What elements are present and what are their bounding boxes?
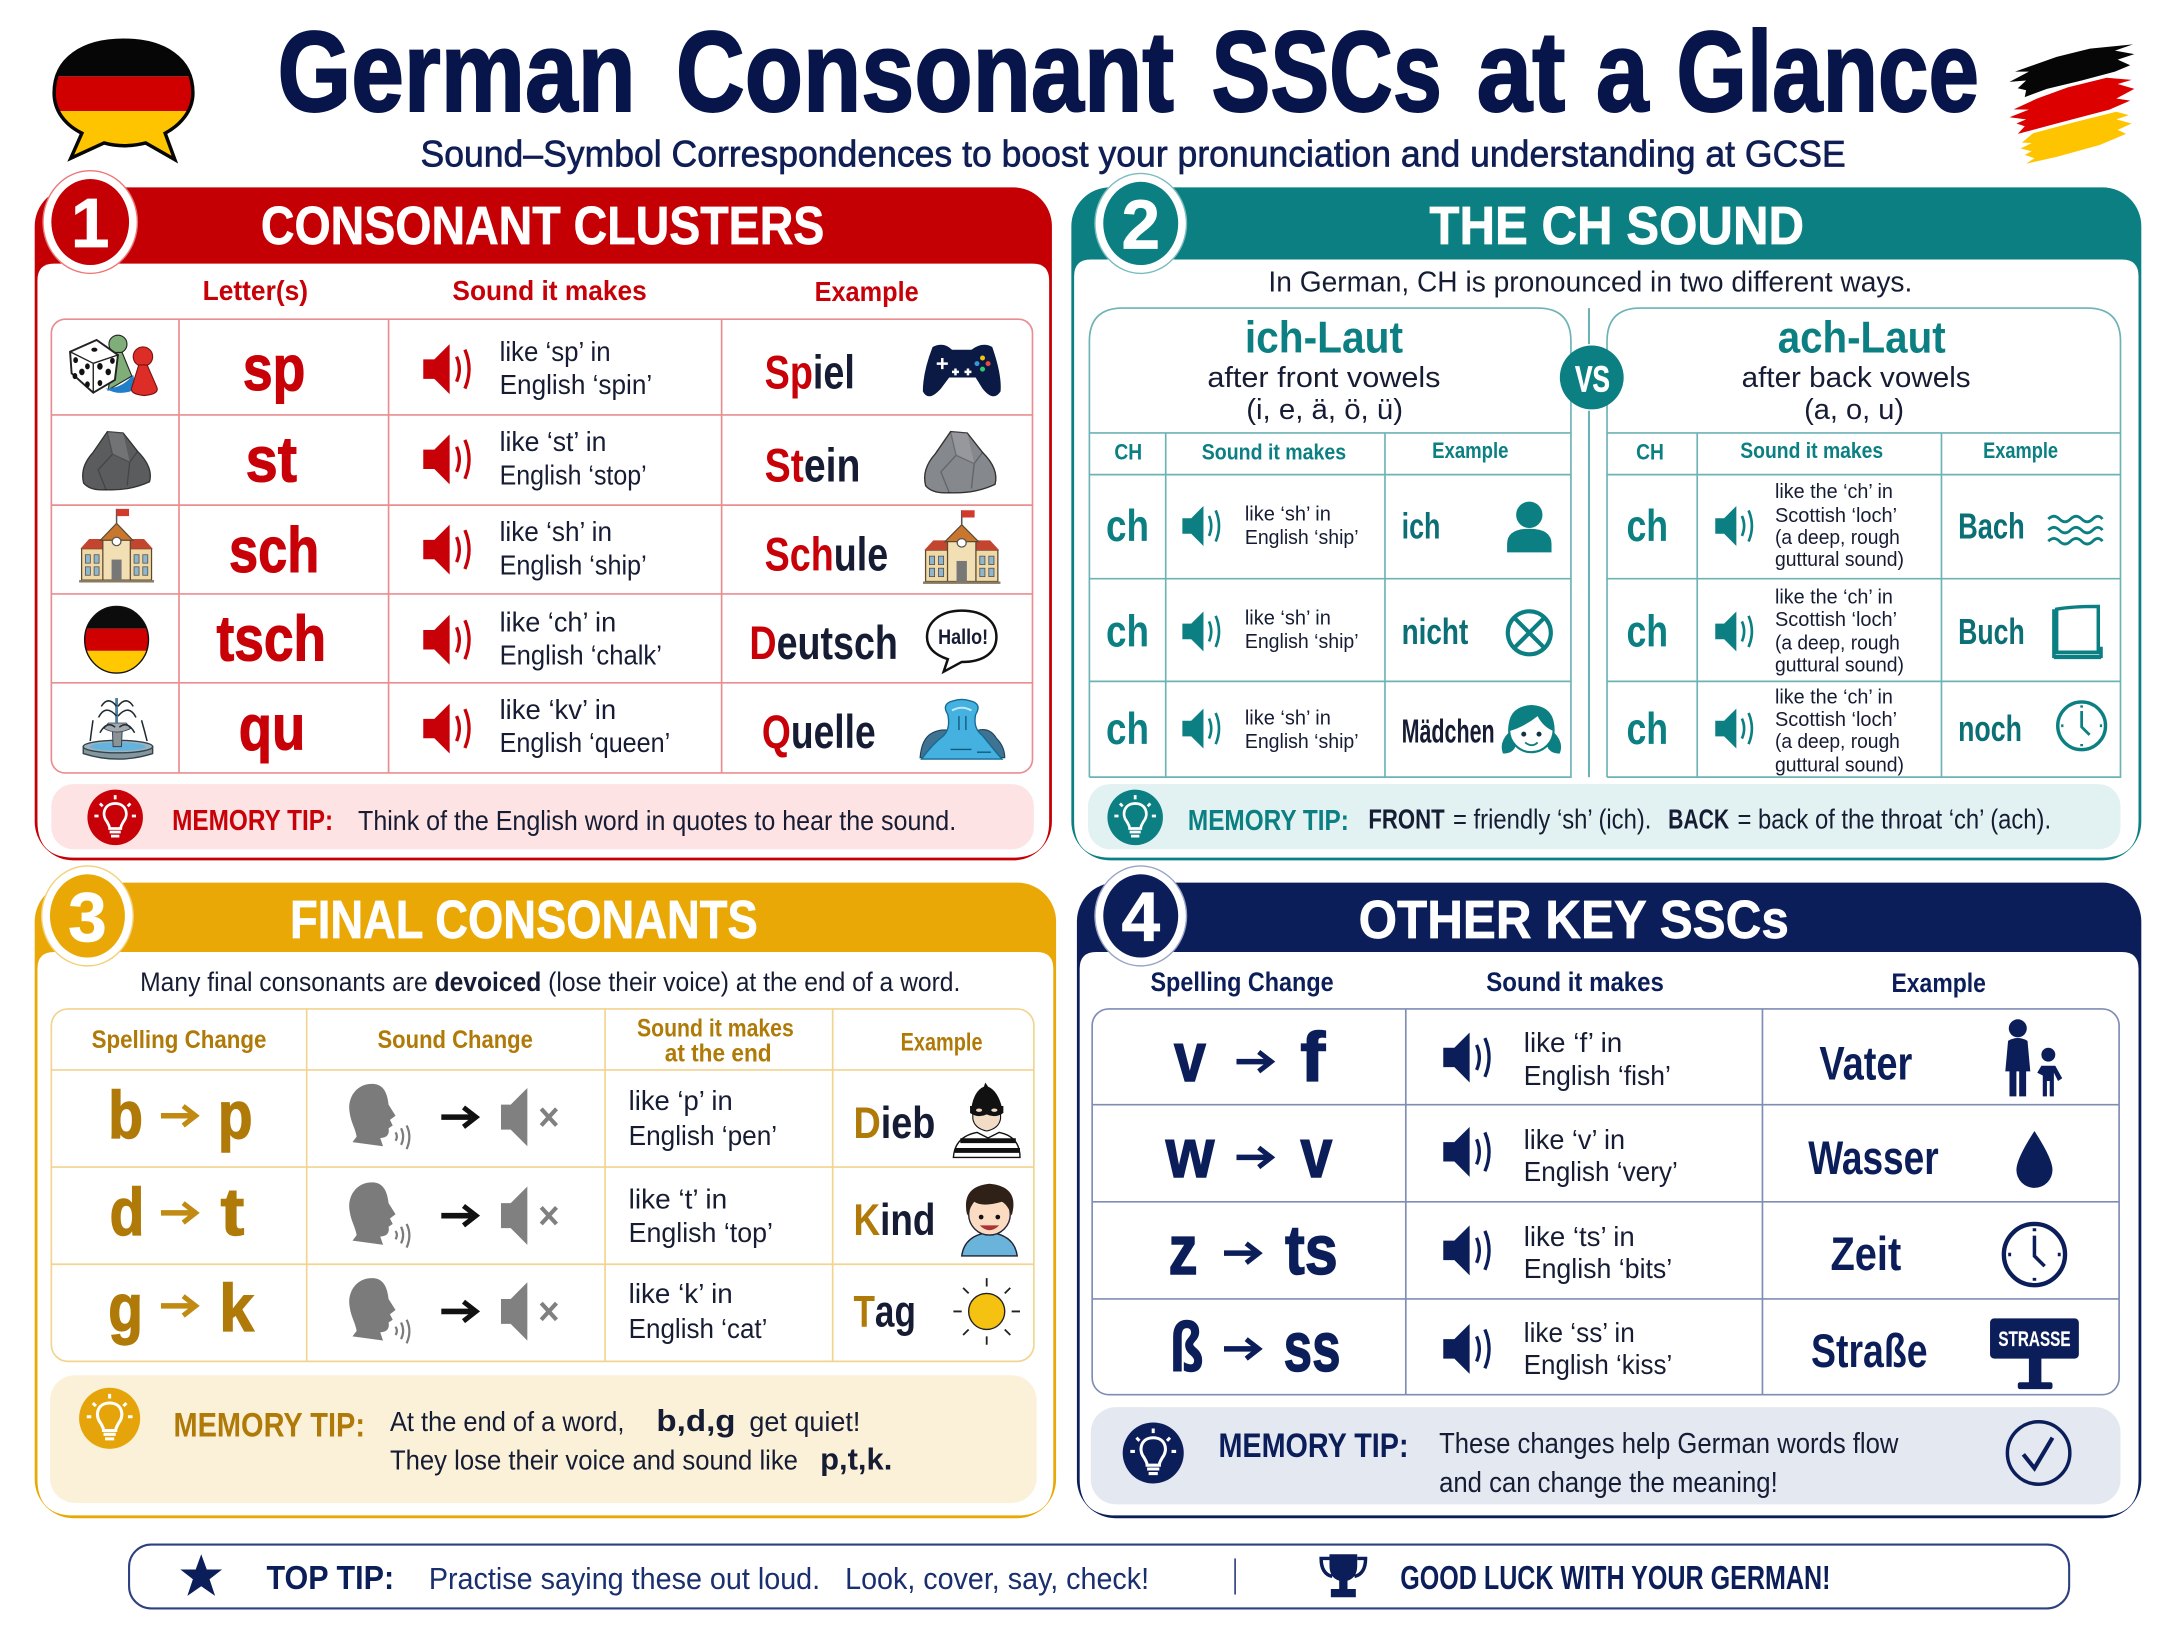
table: ach-Laut: Buch <box>1958 611 2025 652</box>
table: ach-Laut: like the ‘ch’ in <box>1775 687 1893 709</box>
table: ach-Laut: Scottish ‘loch’ <box>1775 709 1897 731</box>
table: ach-Laut: noch <box>1958 708 2022 749</box>
icon: water drop <box>2016 1131 2052 1188</box>
memory tip: MEMORY TIP: <box>1188 805 1349 837</box>
subtitle: Sound–Symbol Correspondences to boost your pronunciation and understanding at GCSE <box>420 133 1846 175</box>
sound descriptions <box>1524 1027 1678 1380</box>
spelling changes: p <box>218 1079 253 1153</box>
sound descriptions: English ‘stop’ <box>500 459 647 490</box>
example words: Spiel <box>765 346 855 399</box>
icon: flag circle <box>83 605 150 674</box>
divider line and VS badge: VS <box>1575 358 1610 399</box>
spelling changes: v <box>1300 1114 1333 1192</box>
column headings: Example <box>815 276 919 307</box>
badge 2 <box>1095 173 1187 273</box>
memory tip: get quiet! <box>749 1406 860 1437</box>
table: ach-Laut: (a deep, rough <box>1775 632 1900 654</box>
badge 4 <box>1095 866 1187 966</box>
spelling changes: z <box>1168 1211 1198 1289</box>
spelling changes: ts <box>1285 1211 1338 1289</box>
example words <box>1808 1037 1939 1377</box>
table: ach-Laut: Scottish ‘loch’ <box>1775 609 1897 631</box>
table <box>1092 1009 2119 1395</box>
badge 1: 1 <box>71 184 110 262</box>
example words: Dieb <box>853 1099 935 1148</box>
icon: thief <box>953 1082 1020 1157</box>
table: ach-Laut <box>1088 308 2120 849</box>
icon: clock <box>2058 702 2106 750</box>
table: ich-Laut: English ‘ship’ <box>1245 731 1359 753</box>
letters: tsch <box>216 603 326 675</box>
icon: waves <box>2048 516 2102 544</box>
table: ach-Laut: Sound it makes <box>1740 438 1883 463</box>
sound descriptions <box>629 1085 777 1344</box>
sound descriptions: like ‘p’ in <box>629 1085 733 1116</box>
intro text: In German, CH is pronounced in two different ways. <box>1268 266 1912 298</box>
table: ich-Laut: like ‘sh’ in <box>1245 503 1331 525</box>
icon: school left <box>79 509 154 583</box>
spelling changes: k <box>219 1272 255 1346</box>
icon: girl <box>1502 705 1561 754</box>
badge 3: 3 <box>68 878 107 956</box>
memory tip: MEMORY TIP: <box>172 805 333 837</box>
sound descriptions: like ‘kv’ in <box>500 694 616 725</box>
divider line and VS badge <box>1560 308 1624 777</box>
icon: sun <box>953 1278 1020 1345</box>
icon: Hallo speech bubble: Hallo! <box>938 626 988 649</box>
heading: FINAL CONSONANTS <box>290 890 758 950</box>
table: ach-Laut: like the ‘ch’ in <box>1775 481 1893 503</box>
spelling changes: f <box>1300 1018 1326 1096</box>
top tip text <box>429 1562 1149 1596</box>
panel: consonant clusters <box>35 171 1052 860</box>
top tip label: TOP TIP: <box>266 1560 394 1597</box>
example words: Vater <box>1819 1037 1912 1090</box>
letters <box>216 332 326 763</box>
spelling changes <box>1165 1018 1341 1386</box>
table: ach-Laut: Example <box>1983 438 2058 463</box>
sound descriptions: English ‘bits’ <box>1524 1253 1672 1284</box>
heading: CONSONANT CLUSTERS <box>261 196 824 256</box>
icon: book <box>2054 606 2101 658</box>
example words: Zeit <box>1830 1227 1901 1280</box>
icon: Hallo speech bubble <box>927 611 996 672</box>
sound descriptions: English ‘top’ <box>629 1217 773 1248</box>
icon: STRASSE sign: STRASSE <box>1998 1327 2071 1351</box>
icon: German flag speech bubble <box>52 38 195 164</box>
icon: star <box>180 1554 222 1596</box>
example words: Tag <box>853 1288 916 1337</box>
icon: school right <box>923 510 1000 584</box>
heading: OTHER KEY SSCs <box>1359 890 1789 950</box>
icon: dark rock <box>83 432 150 490</box>
table: ich-Laut: nicht <box>1402 611 1468 652</box>
icon: water spring <box>920 699 1005 759</box>
title: at <box>1477 9 1565 136</box>
table <box>51 1009 1034 1361</box>
sound descriptions: like ‘sh’ in <box>500 516 612 547</box>
badge 2: 2 <box>1121 185 1160 263</box>
memory tip <box>51 784 1034 849</box>
sound descriptions: English ‘cat’ <box>629 1313 767 1344</box>
icon: fountain <box>83 698 153 759</box>
table: ich-Laut: (i, e, ä, ö, ü) <box>1246 394 1403 426</box>
table: ich-Laut: like ‘sh’ in <box>1245 607 1331 629</box>
table <box>51 319 1032 773</box>
icon: dice and pawns <box>70 335 157 396</box>
column headings: Sound it makes <box>1486 967 1664 997</box>
spelling changes: ss <box>1284 1308 1341 1386</box>
column headings <box>1150 967 1986 998</box>
sound descriptions: English ‘queen’ <box>500 727 670 758</box>
bottom banner <box>129 1545 2069 1608</box>
spelling changes: b <box>108 1079 143 1153</box>
example words: Stein <box>765 439 860 492</box>
column headings: Example <box>901 1029 983 1057</box>
memory tip: = friendly ‘sh’ (ich). <box>1453 803 1651 834</box>
icon: parent and child <box>2005 1019 2062 1096</box>
panel: final consonants <box>35 866 1056 1518</box>
table: ich-Laut: CH <box>1114 439 1142 464</box>
title: Consonant <box>676 9 1174 136</box>
title: a <box>1596 9 1649 136</box>
spelling changes <box>108 1079 255 1346</box>
table: ich-Laut: Example <box>1432 438 1508 463</box>
sound descriptions: like ‘st’ in <box>500 426 606 457</box>
title: SSCs <box>1212 9 1442 136</box>
table: ach-Laut: guttural sound) <box>1775 549 1904 571</box>
icon: STRASSE sign <box>1990 1318 2079 1389</box>
letters: st <box>246 424 297 496</box>
column headings <box>203 275 919 307</box>
memory tip: These changes help German words flow <box>1439 1428 1899 1460</box>
column headings: Spelling Change <box>1150 967 1334 997</box>
sound descriptions: like ‘k’ in <box>629 1278 733 1309</box>
column headings: Spelling Change <box>92 1026 267 1054</box>
table: ach-Laut: ch <box>1626 705 1668 754</box>
badge 4: 4 <box>1121 878 1160 956</box>
sound descriptions: like ‘f’ in <box>1524 1027 1622 1058</box>
memory tip: p,t,k. <box>820 1443 892 1477</box>
top tip text: Look, cover, say, check! <box>845 1562 1149 1596</box>
spelling changes: ß <box>1170 1308 1203 1386</box>
icon: boy <box>962 1184 1017 1256</box>
intro text: Many final consonants are devoiced (lose their voice) at the end of a word. <box>140 967 960 997</box>
title <box>278 9 1979 136</box>
table: ach-Laut: (a, o, u) <box>1804 394 1904 426</box>
sound descriptions: like ‘sp’ in <box>500 336 611 367</box>
memory tip <box>50 1375 1037 1503</box>
column headings: Example <box>1892 968 1986 998</box>
sound descriptions: English ‘spin’ <box>500 369 652 400</box>
top tip text: Practise saying these out loud. <box>429 1562 820 1596</box>
icon: clock <box>2004 1224 2065 1285</box>
sound descriptions: like ‘ch’ in <box>500 606 616 637</box>
table: ach-Laut: (a deep, rough <box>1775 527 1900 549</box>
letters: qu <box>239 691 305 763</box>
sound descriptions: English ‘very’ <box>1524 1156 1678 1187</box>
memory tip: BACK <box>1668 803 1729 834</box>
sound descriptions <box>500 336 670 758</box>
memory tip: Think of the English word in quotes to hear the sound. <box>358 805 956 836</box>
memory tip <box>1091 1407 2120 1504</box>
icon: brush-stroke German flag <box>2009 44 2134 164</box>
example words: Schule <box>765 527 888 580</box>
icon: crossed circle <box>1508 611 1551 654</box>
speakers <box>423 344 469 754</box>
heading: THE CH SOUND <box>1429 196 1804 256</box>
memory tip: They lose their voice and sound like <box>390 1445 798 1476</box>
table: ach-Laut: ch <box>1626 608 1668 657</box>
sound descriptions: English ‘pen’ <box>629 1120 777 1151</box>
title: German <box>278 9 636 136</box>
table: ach-Laut: Bach <box>1958 505 2025 546</box>
table: ich-Laut: after front vowels <box>1207 362 1440 394</box>
table: ich-Laut: ch <box>1106 502 1149 551</box>
sound descriptions: English ‘ship’ <box>500 550 647 581</box>
example words <box>853 1099 935 1337</box>
memory tip: At the end of a word, <box>390 1406 624 1437</box>
example words: Kind <box>853 1196 935 1245</box>
table: ich-Laut: Sound it makes <box>1202 439 1346 464</box>
example words: Straße <box>1811 1324 1928 1377</box>
icon: grey rock <box>925 432 996 493</box>
memory tip: and can change the meaning! <box>1439 1467 1778 1499</box>
table: ach-Laut: Scottish ‘loch’ <box>1775 505 1897 527</box>
badge 3 <box>42 866 133 966</box>
table: ich-Laut: ich <box>1402 505 1440 546</box>
badge 1 <box>43 171 137 273</box>
table: ich-Laut: ch <box>1106 705 1149 754</box>
table: ach-Laut: CH <box>1636 439 1664 464</box>
column headings: Sound it makes <box>452 275 647 306</box>
spelling changes: w <box>1165 1114 1215 1192</box>
table: ich-Laut: English ‘ship’ <box>1245 631 1359 653</box>
letters: sch <box>229 514 319 586</box>
table: ich-Laut: Mädchen <box>1402 713 1495 750</box>
memory tip: FRONT <box>1368 803 1445 834</box>
sound descriptions: English ‘kiss’ <box>1524 1349 1672 1380</box>
sound descriptions: like ‘ss’ in <box>1524 1317 1635 1348</box>
table: ach-Laut: guttural sound) <box>1775 755 1904 777</box>
sound descriptions: like ‘v’ in <box>1524 1124 1625 1155</box>
panel: other key SSCs <box>1077 866 2141 1518</box>
table: ach-Laut: ch <box>1626 502 1668 551</box>
table: ich-Laut: like ‘sh’ in <box>1245 707 1331 729</box>
table: ach-Laut: ach-Laut <box>1778 313 1946 362</box>
good luck text: GOOD LUCK WITH YOUR GERMAN! <box>1400 1560 1830 1597</box>
icon: trophy <box>1321 1554 1366 1597</box>
spelling changes: g <box>108 1272 143 1346</box>
table: ich-Laut: ich-Laut <box>1245 313 1403 362</box>
table: ich-Laut <box>1089 308 1571 777</box>
memory tip: MEMORY TIP: <box>173 1406 365 1444</box>
memory tip: b,d,g <box>656 1404 736 1438</box>
memory tip: MEMORY TIP: <box>1218 1427 1409 1465</box>
spelling changes: v <box>1174 1018 1206 1096</box>
title: Glance <box>1676 9 1979 136</box>
sound descriptions: like ‘t’ in <box>629 1184 727 1215</box>
column headings <box>92 1015 983 1068</box>
table: ach-Laut: like the ‘ch’ in <box>1775 587 1893 609</box>
example words: Deutsch <box>749 616 898 669</box>
column headings: Letter(s) <box>203 275 308 306</box>
icon: game controller <box>923 345 1001 396</box>
spelling changes: d <box>110 1176 144 1250</box>
letters: sp <box>243 332 305 404</box>
example words: Quelle <box>762 705 876 758</box>
sound descriptions: English ‘fish’ <box>1524 1060 1671 1091</box>
table: ach-Laut: guttural sound) <box>1775 655 1904 677</box>
sound descriptions: English ‘chalk’ <box>500 640 662 671</box>
spelling changes: t <box>221 1176 244 1250</box>
table: ich-Laut: ch <box>1106 608 1149 657</box>
example words <box>749 346 898 758</box>
icon: person <box>1507 502 1552 552</box>
sound change icons <box>349 1084 556 1343</box>
column headings: Sound Change <box>377 1026 533 1054</box>
speakers <box>1443 1032 1489 1374</box>
memory tip: = back of the throat ‘ch’ (ach). <box>1737 803 2051 834</box>
table: ach-Laut: (a deep, rough <box>1775 731 1900 753</box>
example words: Wasser <box>1808 1131 1939 1184</box>
column headings: at the end <box>665 1040 772 1068</box>
table: ich-Laut: English ‘ship’ <box>1245 527 1359 549</box>
memory tip <box>1088 784 2120 849</box>
column headings: Sound it makes <box>637 1015 794 1043</box>
table: ach-Laut: after back vowels <box>1742 362 1971 394</box>
sound descriptions: like ‘ts’ in <box>1524 1221 1635 1252</box>
